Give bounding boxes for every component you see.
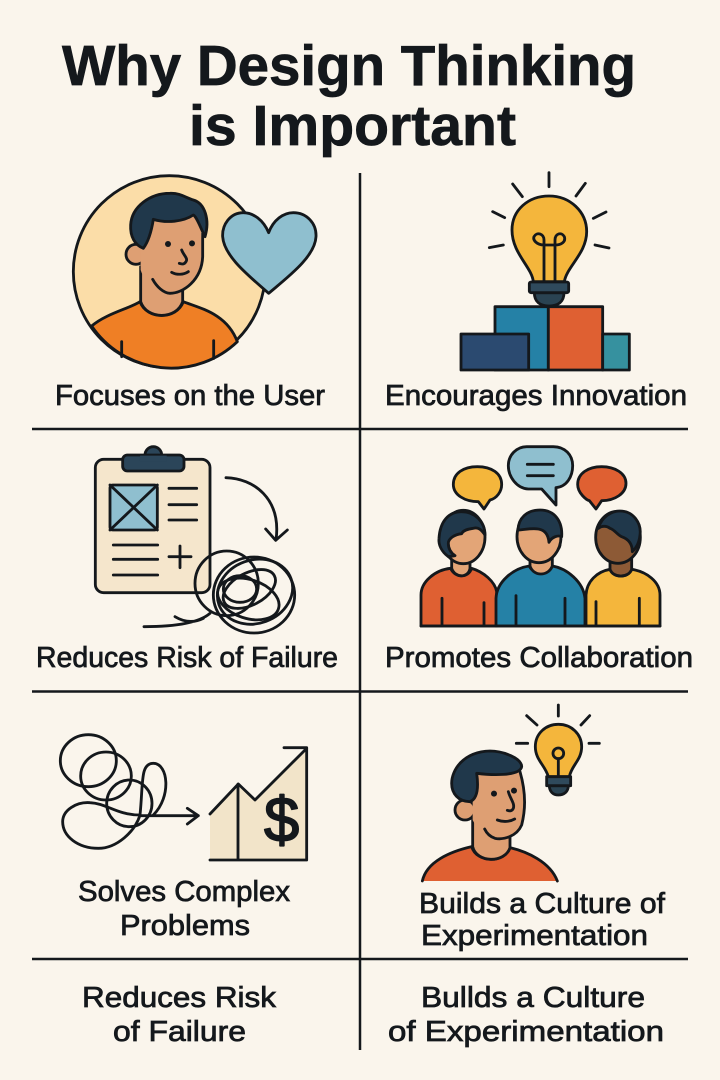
footer label left — [82, 982, 277, 1048]
panel: focuses on the user — [55, 176, 325, 412]
icon: person with idea bulb — [422, 705, 599, 881]
footer label right — [388, 982, 664, 1048]
person center — [496, 510, 585, 626]
label: Encourages Innovation — [385, 380, 687, 412]
speech bubbles — [453, 447, 626, 509]
panel: encourages innovation — [385, 173, 687, 412]
label: Solves Complex — [78, 876, 291, 908]
icon: three people with speech bubbles — [421, 447, 660, 626]
title — [62, 34, 636, 158]
label — [419, 888, 666, 952]
label: Promotes Collaboration — [385, 642, 693, 674]
title: Why Design Thinking — [62, 34, 636, 98]
footer label right: of Experimentation — [388, 1016, 664, 1048]
label: Problems — [120, 910, 250, 942]
icon: scribble arrow to growth chart — [60, 735, 307, 860]
panel: solves complex problems — [60, 735, 307, 942]
icon: clipboard and tangle — [95, 447, 302, 635]
person left — [421, 510, 497, 626]
footer label left: of Failure — [113, 1016, 246, 1048]
label: Reduces Risk of Failure — [36, 642, 338, 674]
icon: scribble arrow to growth chart: $ — [264, 786, 299, 856]
panel: builds a culture of experimentation — [419, 705, 666, 952]
person right — [586, 511, 660, 626]
icon: user with heart — [73, 176, 316, 368]
icon: light bulb on blocks — [461, 173, 629, 370]
label: Focuses on the User — [55, 380, 325, 412]
title: is Important — [189, 94, 516, 158]
label — [78, 876, 291, 942]
panel: promotes collaboration — [385, 447, 693, 674]
label: Builds a Culture of — [419, 888, 666, 920]
label: Experimentation — [421, 920, 648, 952]
footer label left: Reduces Risk — [82, 982, 277, 1014]
panel: reduces risk of failure — [36, 447, 338, 674]
footer label right: Bullds a Culture — [421, 982, 645, 1014]
